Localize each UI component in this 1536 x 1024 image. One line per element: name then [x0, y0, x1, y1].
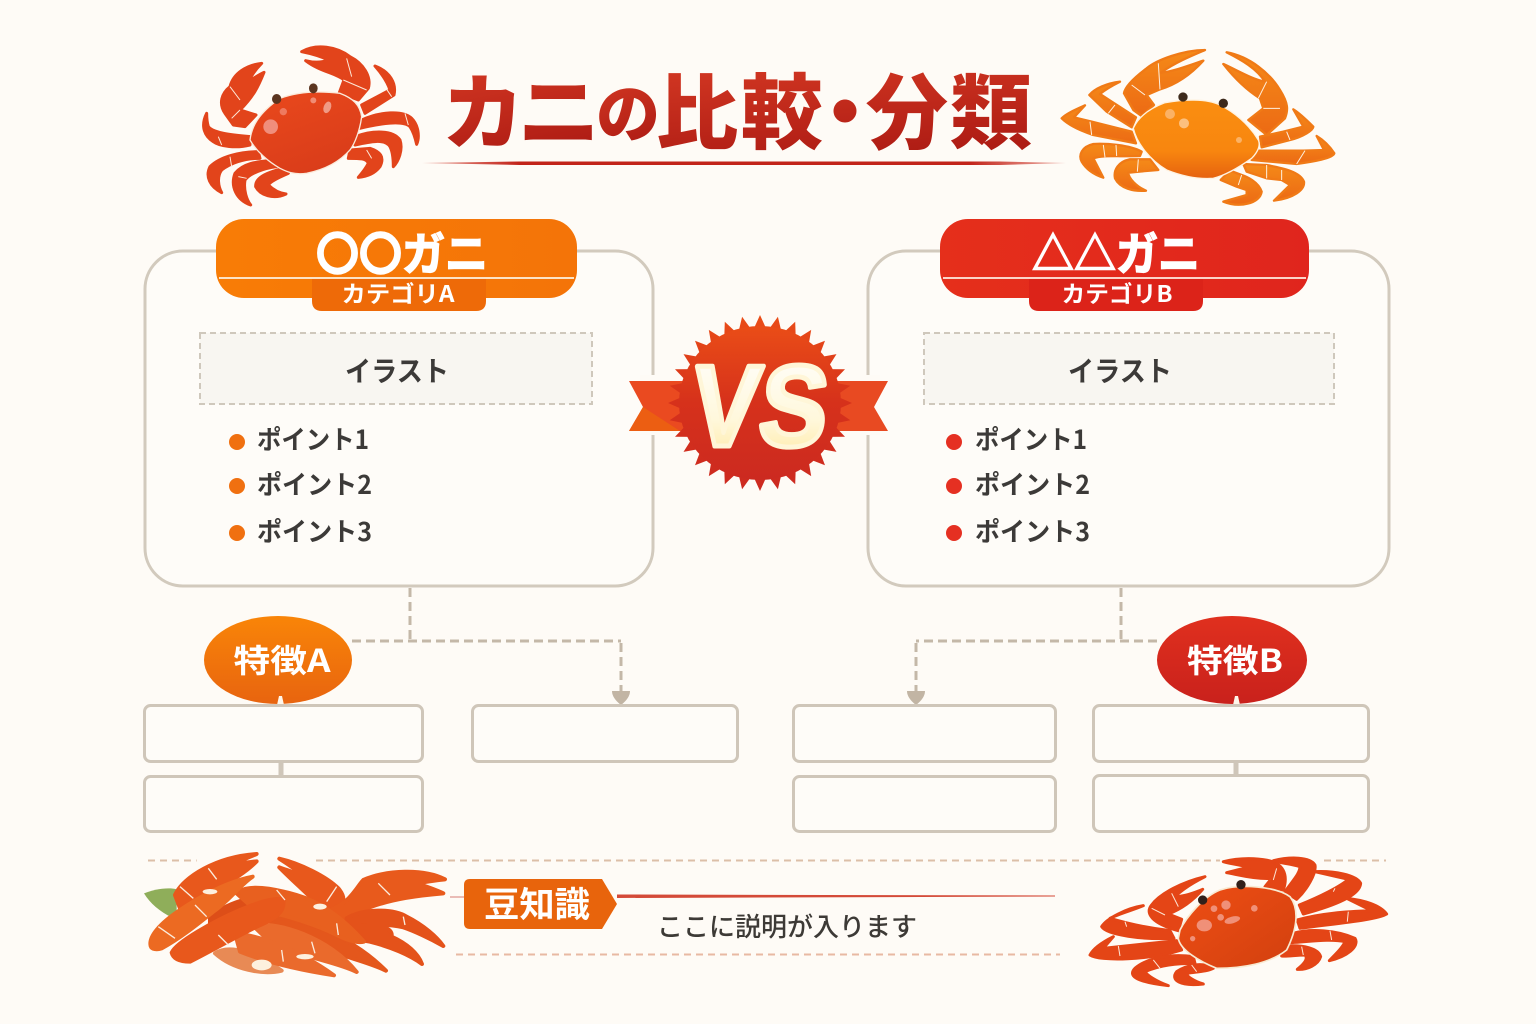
trivia tag: 豆知識: [484, 877, 590, 928]
connector: panel A to boxes: [352, 588, 621, 692]
bullet list B: [946, 420, 1090, 549]
bullet list A: [229, 420, 372, 549]
illustration placeholder B: イラスト: [1068, 350, 1172, 390]
feature badge B: 特徴B: [1187, 636, 1283, 682]
title underline: [422, 162, 1066, 165]
feature badge B: [1157, 616, 1307, 705]
VS badge: VS: [685, 341, 835, 471]
boxes: category B: [794, 706, 1368, 832]
icon: red crab, top left: [204, 47, 418, 205]
icon: orange crab, top right: [1062, 50, 1334, 205]
banner: crab A name: 〇〇ガニ: [316, 218, 488, 283]
panel: crab B: [868, 218, 1389, 586]
trivia description: ここに説明が入ります: [657, 907, 917, 944]
bullet list B: ポイント3: [975, 512, 1090, 549]
trivia: red rule: [617, 894, 1055, 898]
arrowhead B: [907, 691, 925, 705]
panel: crab A: [145, 218, 653, 586]
bullet list B: ポイント2: [975, 465, 1090, 502]
trivia tag: [464, 877, 617, 929]
bullet list A: ポイント2: [257, 465, 372, 502]
banner: crab A name: カテゴリA: [342, 275, 455, 309]
illustration placeholder B: [924, 333, 1334, 404]
bullet list A: ポイント3: [257, 512, 372, 549]
arrowhead A: [612, 691, 630, 705]
divider: trivia top: [148, 860, 1386, 862]
VS badge: [629, 315, 888, 491]
illustration placeholder A: [200, 333, 592, 404]
bullet list A: ポイント1: [257, 420, 369, 457]
illustration placeholder A: イラスト: [345, 350, 449, 390]
feature badge A: [204, 616, 352, 705]
title: 比較・分類: [656, 47, 1032, 166]
title: カニ: [442, 47, 600, 166]
trivia: faint rule: [450, 896, 464, 898]
banner: crab B name: カテゴリB: [1062, 275, 1172, 309]
feature badge A: 特徴A: [234, 636, 331, 682]
banner: crab A name: [216, 218, 577, 311]
title: [442, 47, 1032, 166]
boxes: category A: [144, 706, 738, 832]
connector: panel B to boxes: [916, 588, 1157, 692]
bullet list B: ポイント1: [975, 420, 1087, 457]
title: の: [596, 64, 660, 156]
divider: trivia bottom: [456, 954, 1060, 956]
banner: crab B name: [940, 218, 1309, 311]
icon: red crab, bottom right: [1090, 856, 1387, 986]
icon: pile of crab legs: [144, 853, 445, 975]
banner: crab B name: △△ガニ: [1032, 218, 1200, 283]
